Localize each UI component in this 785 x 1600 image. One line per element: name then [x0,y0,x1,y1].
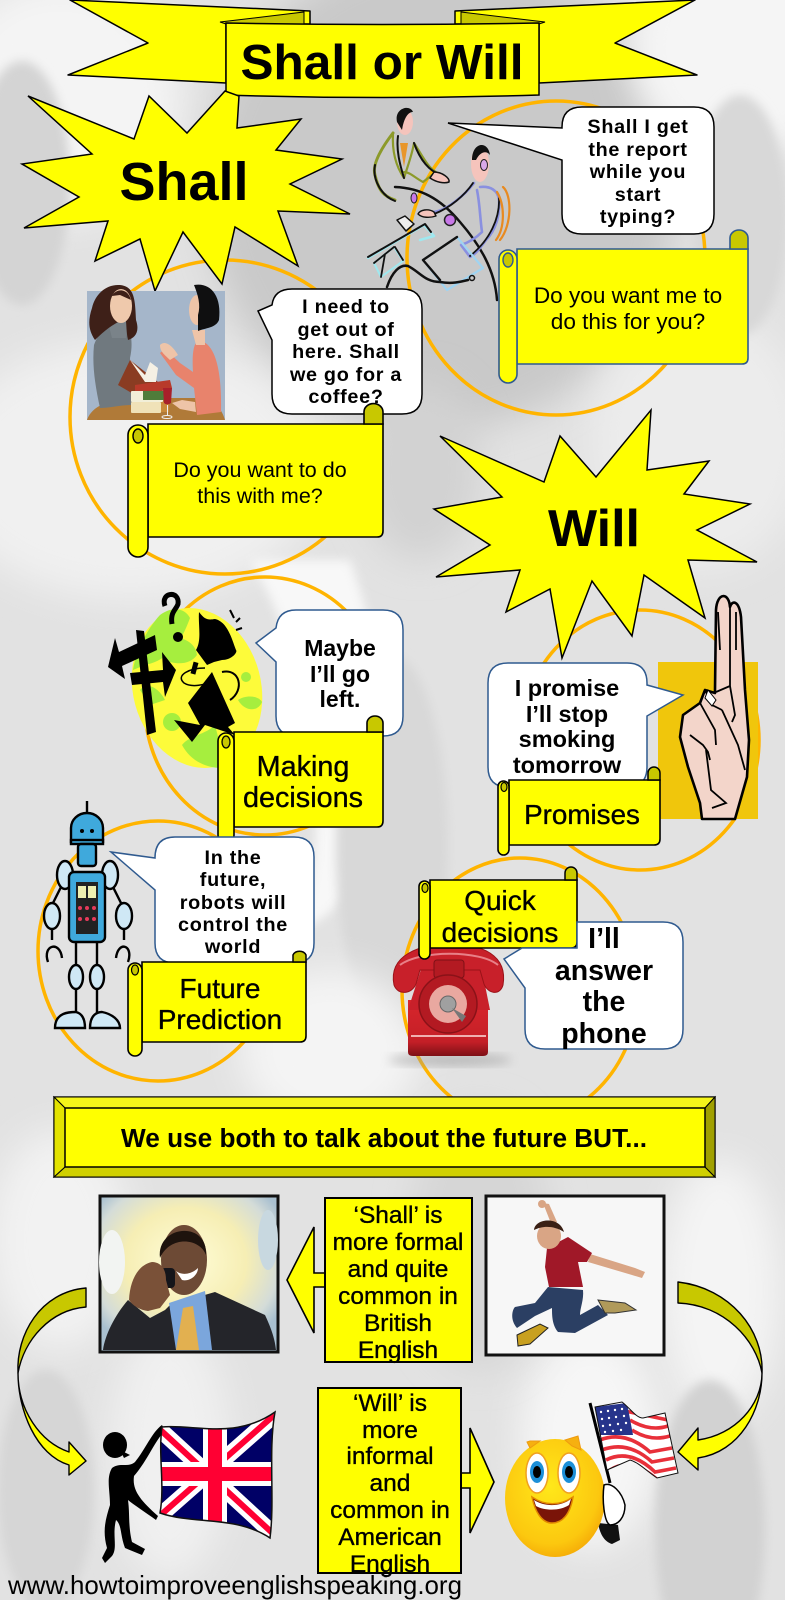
speech bubble: Shall I get the report: while you [589,161,686,183]
speech bubble: Maybe I'll go left: I’ll go [310,661,370,687]
speech bubble: Shall I get the report: Shall I get [587,116,689,138]
speech bubble: I'll answer the phone: the [583,986,625,1018]
box and arrow: Shall is more formal: English [358,1337,438,1364]
speech bubble: I need to get out of here: coffee? [308,386,384,408]
orange ellipse: left [70,260,380,574]
speech bubble: I'll answer the phone: phone [561,1018,647,1050]
scroll: Do you want me to do this for you: do this for you? [551,309,705,334]
orange ellipse: top right [407,101,705,415]
starburst: Will: Will [548,500,640,558]
speech bubble: I'll answer the phone [504,922,683,1050]
speech bubble: I need to get out of here: here. Shall [292,341,400,363]
website url: www.howtoimproveenglishspeaking.org [7,1570,462,1600]
title text: Shall or Will [240,35,524,90]
box and arrow: Shall is more formal: British [364,1310,432,1337]
speech bubble: I'll answer the phone: I’ll [588,923,620,955]
box and arrow: Will is more informal [318,1388,494,1578]
speech bubble: I need to get out of here: I need to [302,296,390,318]
orange ellipse: prediction [38,821,278,1081]
speech bubble: I promise I'll stop smoking tomorrow: smoking [519,726,615,752]
speech bubble: In the future robots will control the world: control the [178,914,288,936]
photo: man on phone [99,1196,278,1352]
box and arrow: Will is more informal: informal [346,1443,434,1470]
speech bubble: I need to get out of here [258,289,422,414]
scroll: Making decisions: Making [257,751,349,783]
speech bubble: Maybe I'll go left: Maybe [304,635,376,661]
box and arrow: Shall is more formal: ‘Shall’ is [354,1202,442,1229]
scroll: Making decisions: decisions [243,782,363,814]
curved arrow: left [18,1288,86,1475]
clipart: robot [44,801,132,1028]
speech bubble: Shall I get the report: start [615,184,661,206]
scroll: Do you want to do this with me [128,404,383,557]
scroll: Promises [498,767,660,855]
scroll: Future Prediction: Future [180,973,260,1004]
speech bubble: I promise I'll stop smoking tomorrow: tomorrow [513,752,622,778]
starburst: Will [434,410,757,658]
speech bubble: I promise I'll stop smoking tomorrow [488,663,683,787]
speech bubble: I promise I'll stop smoking tomorrow: I promise [515,675,619,701]
title banner [68,0,697,98]
scroll: Quick decisions [419,867,577,959]
photo: boy jumping [486,1196,664,1355]
box and arrow: Will is more informal: English [350,1551,430,1578]
clipart: red telephone [388,944,512,1066]
speech bubble: Shall I get the report [448,107,714,234]
box and arrow: Will is more informal: common in [330,1497,450,1524]
box and arrow: Will is more informal: and [370,1470,410,1497]
starburst: Shall: Shall [119,152,249,212]
speech bubble: In the future robots will control the world: In the [205,847,261,869]
image: two women talking [87,285,225,420]
box and arrow: Will is more informal: American [338,1524,442,1551]
figure with UK flag [102,1405,280,1563]
banner: We use both to talk about the future: We use both to talk about the future BUT... [121,1125,647,1153]
speech bubble: In the future robots will control the world: world [204,936,261,958]
box and arrow: Shall is more formal [287,1198,472,1364]
speech bubble: I need to get out of here: we go for a [289,364,402,386]
scroll: Quick decisions: Quick [464,885,537,916]
starburst: Shall [22,91,350,291]
scroll: Future Prediction [128,951,306,1056]
clipart: person choosing a direction [108,593,280,783]
orange ellipse: promises [521,610,759,870]
speech bubble: In the future robots will control the world [111,837,314,963]
box and arrow: Shall is more formal: and quite [348,1256,448,1283]
scroll: Making decisions [218,716,383,843]
clipart: two people at a desk [368,108,509,300]
speech bubble: I'll answer the phone: answer [555,955,653,987]
speech bubble: In the future robots will control the world: robots will [180,892,286,914]
box and arrow: Shall is more formal: more formal [333,1229,463,1256]
box and arrow: Will is more informal: ‘Will’ is [353,1390,427,1417]
speech bubble: Shall I get the report: typing? [600,206,676,228]
speech bubble: Maybe I'll go left [256,610,403,736]
orange ellipse: making decisions [145,577,385,835]
speech bubble: Shall I get the report: the report [588,139,688,161]
scroll: Do you want me to do this for you: Do you want me to [534,283,722,308]
scroll: Future Prediction: Prediction [158,1004,282,1035]
speech bubble: Maybe I'll go left: left. [320,686,360,712]
speech bubble: I promise I'll stop smoking tomorrow: I’ll stop [526,701,608,727]
curved arrow: right [678,1282,762,1470]
scroll: Do you want to do this with me: Do you want to do [173,458,347,482]
clipart: hand with crossed fingers [658,596,758,819]
banner: We use both to talk about the future [54,1097,715,1177]
box and arrow: Shall is more formal: common in [338,1283,458,1310]
scroll: Quick decisions: decisions [442,917,558,948]
speech bubble: I need to get out of here: get out of [297,319,395,341]
orange ellipse: quick decisions [402,858,638,1122]
smiley with US flag [505,1398,682,1557]
speech bubble: In the future robots will control the world: future, [200,869,266,891]
scroll: Promises: Promises [524,799,640,830]
scroll: Do you want me to do this for you [499,230,748,383]
box and arrow: Will is more informal: more [362,1417,418,1444]
scroll: Do you want to do this with me: this with me? [197,484,323,508]
